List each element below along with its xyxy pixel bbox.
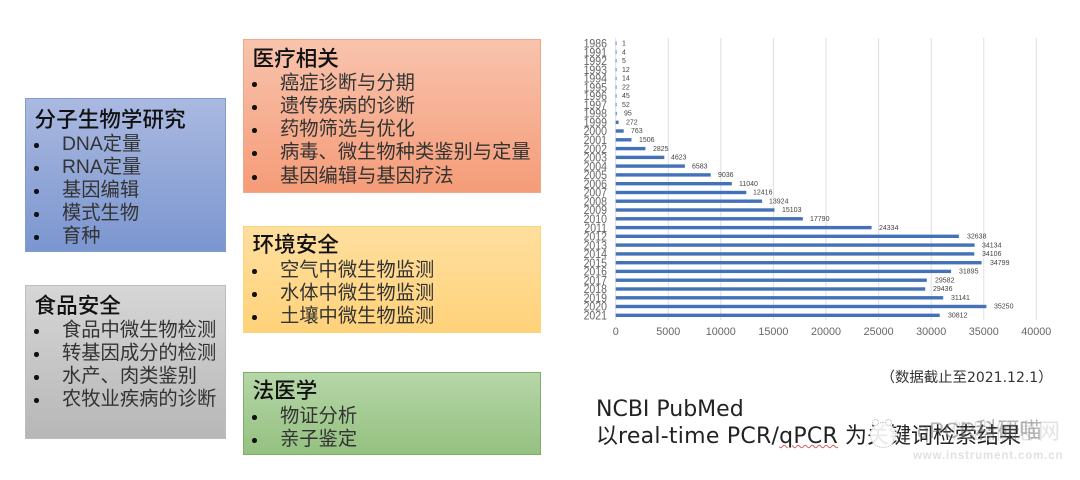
bar value labels: 6583 (692, 163, 708, 170)
year axis labels: 2003 (584, 152, 607, 165)
panel: medical (243, 39, 541, 193)
item: breeding: 育种 (62, 226, 101, 247)
value axis labels (613, 326, 1051, 338)
bar value labels: 34134 (982, 242, 1002, 249)
heading: environmental safety: 环境安全 (252, 232, 339, 257)
year axis labels: 2012 (584, 231, 607, 244)
bar value labels: 17790 (810, 216, 830, 223)
value axis labels: 40000 (1021, 326, 1051, 338)
watermark url: www.instrument.com.cn (913, 450, 1063, 462)
bar value labels: 30812 (948, 312, 968, 320)
bar value labels: 1506 (639, 137, 655, 144)
panel: molecular biology research (25, 98, 226, 252)
item: cancer diagnosis and staging: 癌症诊断与分期 (280, 73, 415, 94)
panel: forensics (243, 372, 541, 455)
year axis labels: 1996 (584, 91, 607, 103)
watermark logo (870, 419, 896, 448)
item: model organisms: 模式生物 (62, 203, 139, 224)
bar value labels: 763 (631, 128, 643, 135)
item: GMO detection: 转基因成分的检测 (62, 343, 216, 364)
year axis labels: 2004 (584, 161, 607, 173)
year axis labels: 2020 (584, 301, 607, 314)
year axis labels: 2018 (584, 284, 607, 296)
bar value labels: 4623 (671, 155, 687, 162)
value axis labels: 25000 (864, 326, 894, 338)
bar value labels: 12416 (753, 190, 773, 197)
bar value labels: 32638 (967, 234, 987, 240)
bar value labels: 29436 (933, 286, 953, 293)
item: food microbe detection: 食品中微生物检测 (62, 320, 216, 341)
value axis labels: 5000 (656, 326, 680, 338)
year axis labels: 2001 (584, 135, 607, 147)
bar value labels: 272 (626, 120, 638, 126)
bar value labels: 24334 (879, 225, 899, 232)
panel: food safety (25, 285, 226, 439)
value axis labels: 10000 (706, 326, 736, 338)
bar value labels: 34106 (982, 251, 1002, 258)
year axis labels: 2011 (584, 222, 607, 235)
year axis labels: 2008 (584, 196, 607, 209)
watermark account name: qPCR科研喵 (917, 418, 1042, 443)
note: data cutoff date: （数据截止至2021.12.1） (881, 370, 1053, 386)
heading: forensics: 法医学 (252, 378, 317, 403)
value axis labels: 0 (613, 326, 619, 338)
bar value labels: 29582 (935, 277, 955, 284)
bar value labels: 31895 (959, 269, 979, 276)
bars (616, 42, 986, 317)
bar value labels: 9036 (718, 172, 734, 179)
item: water microbe monitoring: 水体中微生物监测 (280, 283, 434, 304)
bar value labels: 15103 (782, 207, 802, 214)
year axis labels (584, 38, 607, 323)
year axis labels: 1994 (584, 73, 607, 86)
item: virus and microbe identification: 病毒、微生物种类鉴别与定量 (280, 142, 531, 163)
watermark site name: 仪器信息网 (950, 419, 1060, 444)
year axis labels: 2009 (584, 205, 607, 217)
year axis labels: 1993 (584, 64, 607, 77)
bar value labels: 12 (622, 67, 630, 74)
bar value labels: 13924 (769, 198, 789, 205)
bar value labels: 14 (622, 76, 630, 83)
year axis labels: 2010 (584, 214, 607, 226)
year axis labels: 2002 (584, 143, 607, 156)
year axis labels: 1992 (584, 56, 607, 68)
item: air microbe monitoring: 空气中微生物监测 (280, 260, 434, 281)
bar value labels: 4 (622, 49, 626, 56)
bar value labels: 52 (622, 102, 630, 109)
item: agricultural disease diagnosis: 农牧业疾病的诊断 (62, 389, 216, 410)
bar value labels: 1 (622, 40, 626, 48)
value axis labels: 20000 (811, 326, 841, 338)
year axis labels: 2014 (584, 249, 607, 261)
year axis labels: 2007 (584, 187, 607, 200)
bar value labels: 34799 (990, 260, 1010, 267)
caption: data source and search term (596, 397, 1021, 449)
year axis labels: 2015 (584, 257, 607, 270)
heading: molecular biology research: 分子生物学研究 (34, 107, 186, 132)
item: gene editing: 基因编辑 (62, 180, 139, 201)
year axis labels: 2019 (584, 293, 607, 305)
value axis labels: 15000 (758, 326, 788, 338)
item: paternity testing: 亲子鉴定 (280, 429, 357, 450)
year axis labels: 2013 (584, 240, 607, 252)
bar value labels: 2825 (653, 146, 669, 153)
item: gene editing and gene therapy: 基因编辑与基因疗法 (280, 166, 454, 187)
year axis labels: 1998 (584, 108, 607, 121)
caption: data source and search term: NCBI PubMed (596, 397, 744, 422)
item: soil microbe monitoring: 土壤中微生物监测 (280, 306, 434, 327)
item: genetic disease diagnosis: 遗传疾病的诊断 (280, 96, 415, 117)
value axis labels: 30000 (916, 326, 946, 338)
item: evidence analysis: 物证分析 (280, 406, 357, 427)
bar value labels: 95 (624, 111, 632, 118)
item: seafood and meat identification: 水产、肉类鉴别 (62, 366, 197, 387)
heading: food safety: 食品安全 (34, 293, 121, 318)
heading: medical: 医疗相关 (252, 46, 339, 71)
year axis labels: 1995 (584, 82, 607, 95)
item: DNA quantification: DNA定量 (62, 134, 141, 155)
year axis labels: 1997 (584, 99, 607, 112)
year axis labels: 1999 (584, 117, 607, 130)
bar value labels: 45 (622, 93, 630, 100)
bar value labels (622, 40, 1014, 320)
year axis labels: 2021 (584, 310, 607, 323)
value axis labels: 35000 (969, 326, 999, 338)
year axis labels: 2005 (584, 170, 607, 182)
item: drug screening and optimization: 药物筛选与优化 (280, 119, 415, 140)
year axis labels: 2016 (584, 266, 607, 279)
bar value labels: 35250 (994, 304, 1014, 311)
year axis labels: 2000 (584, 126, 607, 138)
bar value labels: 22 (622, 84, 630, 91)
year axis labels: 1986 (584, 38, 607, 51)
item: RNA quantification: RNA定量 (62, 157, 141, 178)
year axis labels: 2017 (584, 275, 607, 288)
bar value labels: 5 (622, 58, 626, 65)
year axis labels: 2006 (584, 178, 607, 191)
bar value labels: 31141 (951, 295, 970, 302)
year axis labels: 1991 (584, 47, 607, 59)
panel: environmental safety (243, 226, 541, 333)
bar value labels: 11040 (739, 181, 758, 188)
watermark (870, 418, 1063, 462)
caption: data source and search term: 以real-time PCR/qPCR 为关键词检索结果 (596, 424, 1021, 449)
